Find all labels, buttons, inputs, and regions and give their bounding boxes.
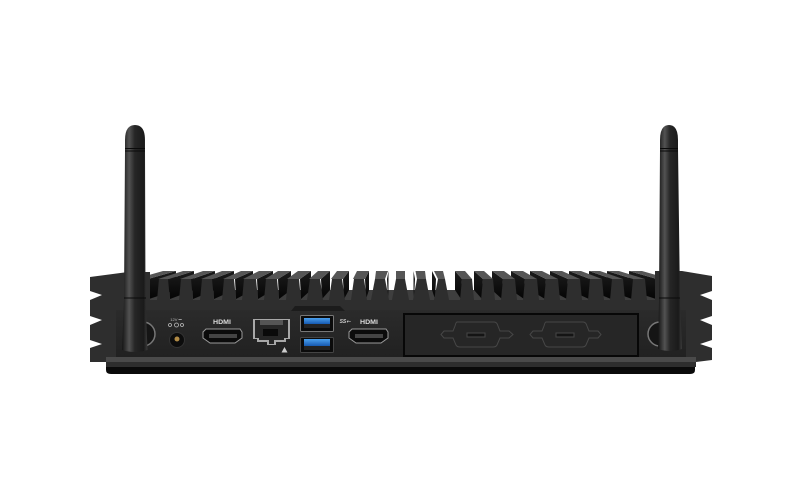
DC power jack [168,317,184,348]
antenna ring [124,148,146,298]
chassis [90,271,712,374]
jack socket [170,332,184,348]
USB SuperSpeed label: SS⇠ [340,319,351,325]
fin front faces [157,279,647,300]
HDMI port 2 [349,320,388,343]
warning triangle [282,347,288,352]
blank serial port panel [404,314,638,356]
upper USB port [300,316,334,332]
HDMI socket [349,329,388,343]
antenna ring [659,148,680,298]
left power button [131,322,155,346]
chassis foot [106,362,695,374]
HDMI label: HDMI [213,320,231,326]
rear port band [116,310,686,357]
right power button [648,322,672,346]
serial knockout 1 [441,322,513,347]
serial knockout 2 [530,322,601,347]
raised usb housing edge [291,306,345,311]
chassis body with side notches [90,271,712,367]
ethernet port [253,319,290,352]
back wall between fins [140,290,665,302]
HDMI port 1 [203,320,242,343]
voltage label: 12V ⎓ [170,317,183,322]
left antenna [122,125,148,352]
fin side faces [148,271,657,299]
lower USB port [300,338,334,352]
HDMI label: HDMI [360,320,378,326]
fin top faces [135,271,670,279]
HDMI socket [203,329,242,343]
polarity symbol [168,323,184,327]
USB 3.0 ports [300,316,351,352]
lower lip [106,357,696,362]
right antenna [658,125,682,351]
